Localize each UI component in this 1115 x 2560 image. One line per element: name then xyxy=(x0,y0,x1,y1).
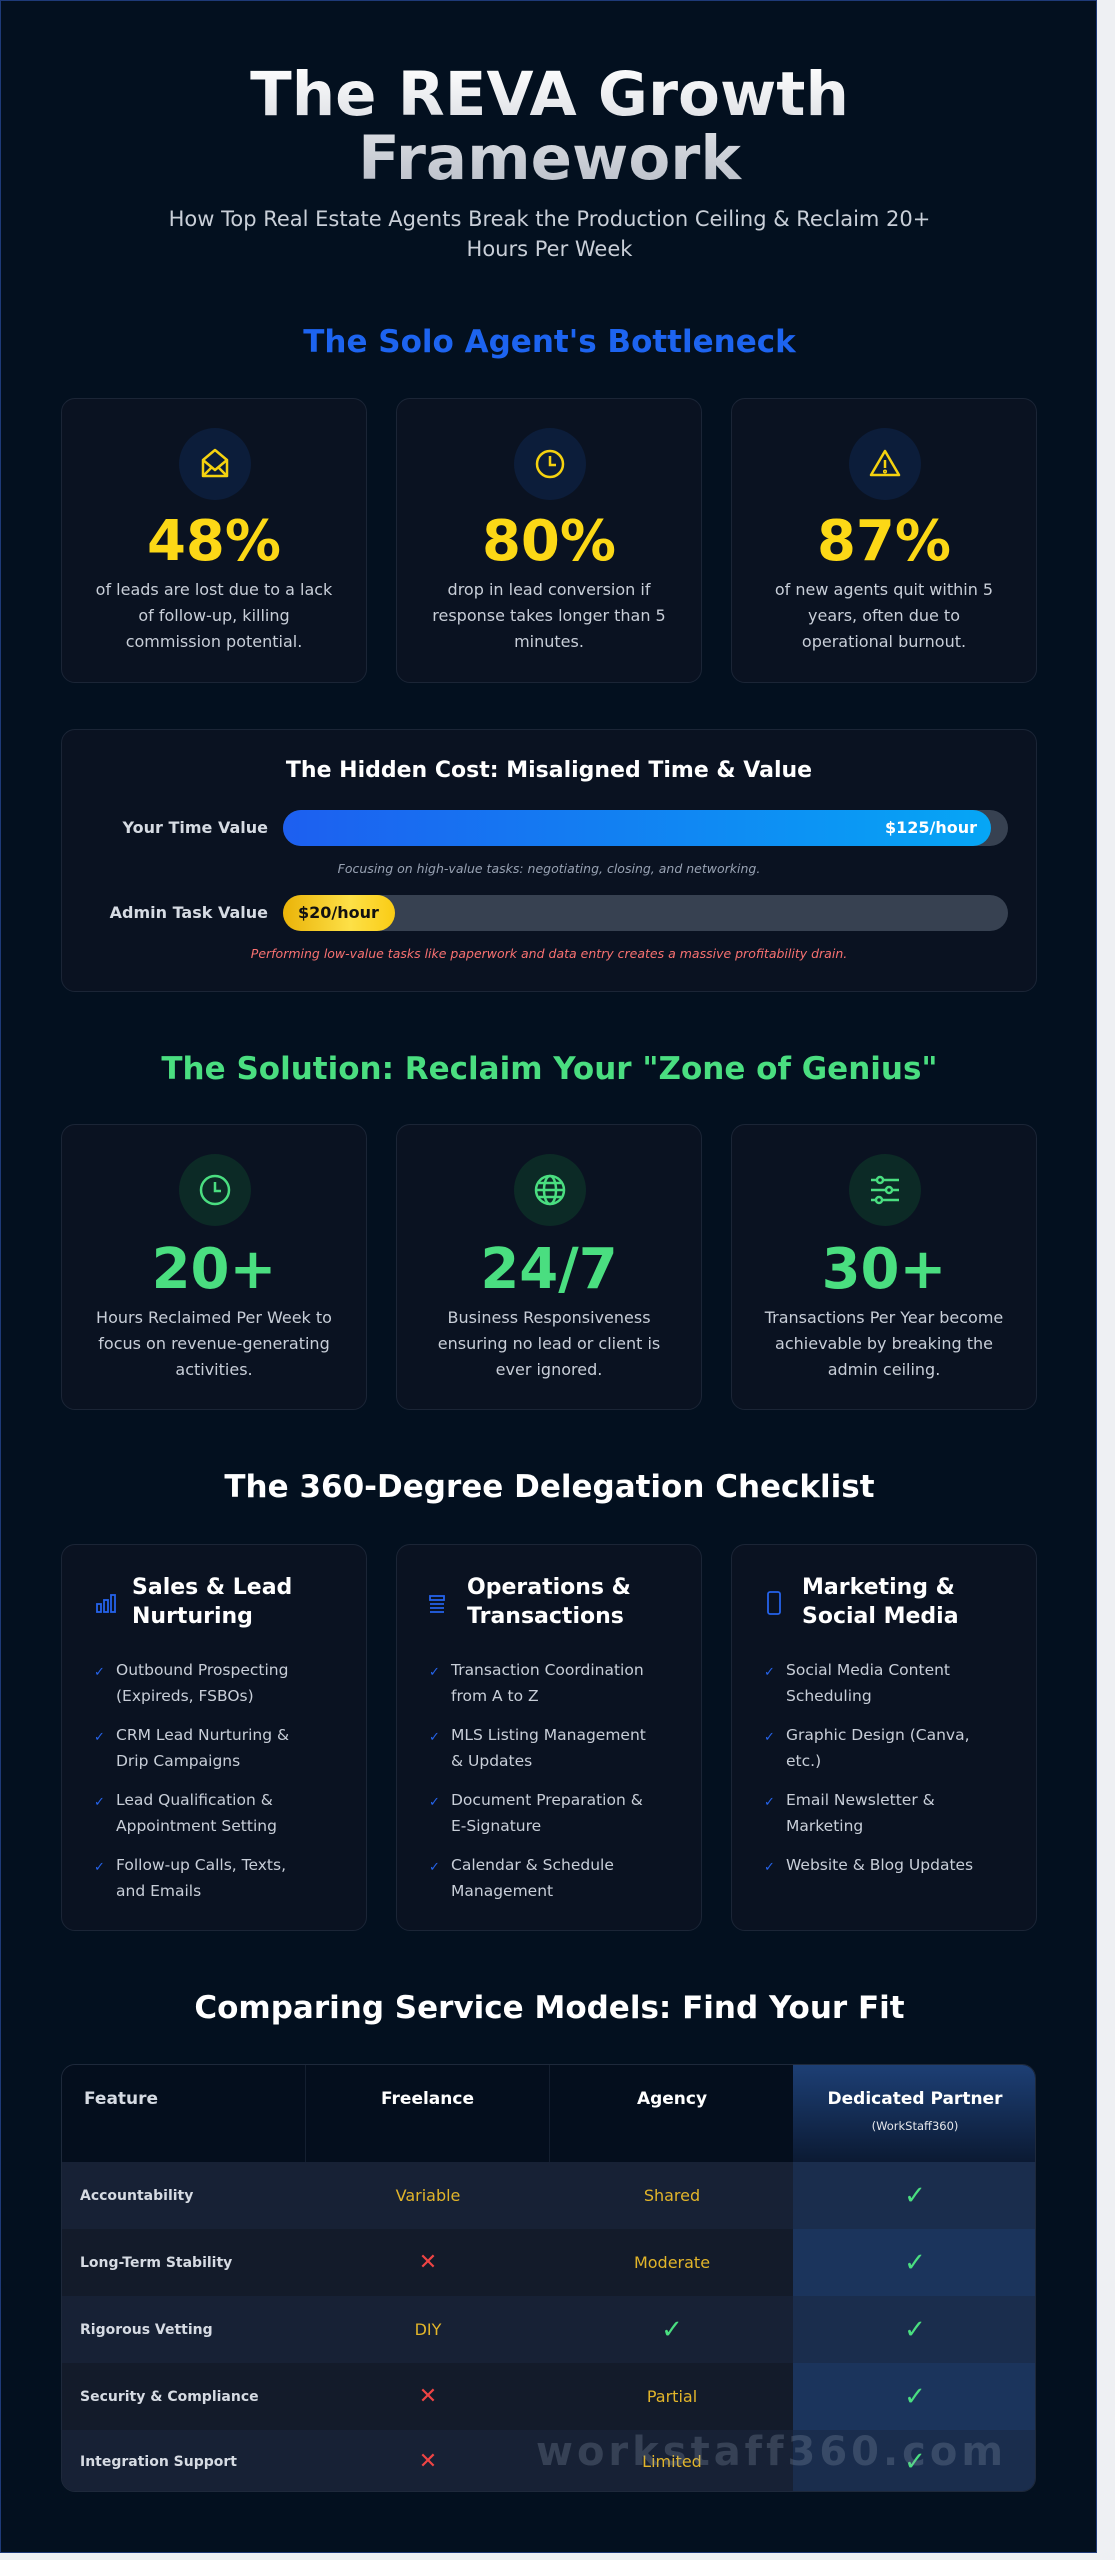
icon: envelope xyxy=(179,428,251,500)
comparison table xyxy=(61,2064,1036,2492)
label: your time value: Your Time Value xyxy=(123,818,268,837)
row: security: Security & Compliance xyxy=(80,2388,259,2404)
list: Follow-up Calls, Texts, and Emails xyxy=(116,1856,286,1900)
subtitle: How Top Real Estate Agents Break the Production Ceiling & Reclaim 20+ xyxy=(169,207,930,231)
icon: list xyxy=(429,1595,445,1613)
row: accountability: Shared xyxy=(644,2186,700,2205)
stat description: of leads are lost due to a lack of follow-up, killing commission potential. xyxy=(96,580,332,651)
list: Email Newsletter & Marketing xyxy=(786,1791,935,1835)
bar: admin: $20/hour xyxy=(298,903,379,922)
panel: 24/7 xyxy=(396,1124,702,1410)
heading: Social Media xyxy=(802,1604,959,1629)
header row xyxy=(62,2065,1037,2162)
description: Hours Reclaimed Per Week to focus on revenue-generating activities. xyxy=(96,1308,332,1379)
heading: bottleneck: The Solo Agent's Bottleneck xyxy=(303,324,796,360)
heading: Marketing & xyxy=(802,1575,955,1600)
heading: solution: The Solution: Reclaim Your "Zone of Genius" xyxy=(161,1051,938,1087)
list: Social Media Content Scheduling xyxy=(786,1661,950,1705)
panel: 30+ xyxy=(731,1124,1037,1410)
stat number: 48% xyxy=(147,509,281,574)
header row: Feature xyxy=(84,2089,158,2109)
heading: Sales & Lead xyxy=(132,1575,292,1600)
list: Calendar & Schedule Management xyxy=(451,1856,614,1900)
panel: stat 87% xyxy=(731,398,1037,683)
icon: clock xyxy=(514,428,586,500)
row: stability: ✓ xyxy=(904,2248,926,2278)
row: integration: Limited xyxy=(642,2452,702,2471)
row: vetting: DIY xyxy=(415,2320,441,2339)
icon: sliders xyxy=(849,1154,921,1226)
caption: Focusing on high-value tasks: negotiating, closing, and networking. xyxy=(338,861,760,876)
list: Graphic Design (Canva, etc.) xyxy=(786,1726,970,1770)
stat description: of new agents quit within 5 years, often due to operational burnout. xyxy=(775,580,993,651)
panel: stat 80% xyxy=(396,398,702,683)
heading xyxy=(467,1575,631,1629)
title xyxy=(1,63,1098,191)
list: MLS Listing Management & Updates xyxy=(451,1726,646,1770)
heading: Nurturing xyxy=(132,1604,253,1629)
stat number: 20+ xyxy=(152,1237,276,1302)
caption: drain: Performing low-value tasks like paperwork and data entry creates a massive profitability drain. xyxy=(251,946,847,961)
header row: (WorkStaff360) xyxy=(872,2119,958,2133)
list xyxy=(766,1661,973,1874)
stat number: 24/7 xyxy=(480,1237,618,1302)
row: vetting xyxy=(62,2296,1037,2363)
bar: time value: $125/hour xyxy=(885,818,977,837)
stat number: 87% xyxy=(817,509,951,574)
row: integration: Integration Support xyxy=(80,2454,237,2470)
list: Transaction Coordination from A to Z xyxy=(451,1661,644,1705)
row: stability: Moderate xyxy=(634,2253,710,2272)
row: vetting: ✓ xyxy=(904,2314,926,2344)
list: Outbound Prospecting (Expireds, FSBOs) xyxy=(116,1661,288,1705)
panel: marketing checklist xyxy=(731,1544,1037,1931)
header row: Dedicated Partner xyxy=(828,2089,1002,2109)
list: Website & Blog Updates xyxy=(786,1856,973,1874)
row: security: ✕ xyxy=(419,2384,437,2409)
heading: comparison: Comparing Service Models: Find Your Fit xyxy=(194,1990,905,2026)
bar: time value xyxy=(283,810,1008,846)
heading xyxy=(132,1575,292,1629)
row: security: Partial xyxy=(647,2387,697,2406)
heading: The Hidden Cost: Misaligned Time & Value xyxy=(286,758,812,783)
list xyxy=(96,1661,289,1900)
row: accountability: Variable xyxy=(396,2186,460,2205)
list xyxy=(431,1661,646,1900)
panel: 20+ xyxy=(61,1124,367,1410)
subtitle: Hours Per Week xyxy=(467,237,632,261)
heading: Transactions xyxy=(467,1604,624,1629)
row: stability xyxy=(62,2229,1037,2296)
stat number: 30+ xyxy=(822,1237,946,1302)
row: accountability: Accountability xyxy=(80,2188,193,2204)
title: Framework xyxy=(358,123,741,194)
panel: stat 48% xyxy=(61,398,367,683)
label: admin task value: Admin Task Value xyxy=(110,903,268,922)
list: Document Preparation & E-Signature xyxy=(451,1791,643,1835)
heading xyxy=(802,1575,959,1629)
icon: globe xyxy=(514,1154,586,1226)
subtitle xyxy=(169,207,930,261)
icon: warning xyxy=(849,428,921,500)
row: stability: Long-Term Stability xyxy=(80,2254,232,2270)
stat number: 80% xyxy=(482,509,616,574)
watermark: workstaff360.com xyxy=(536,2429,1007,2475)
stat description: drop in lead conversion if response takes longer than 5 minutes. xyxy=(432,580,666,651)
description: Transactions Per Year become achievable by breaking the admin ceiling. xyxy=(765,1308,1003,1379)
panel: sales checklist xyxy=(61,1544,367,1931)
list: Lead Qualification & Appointment Setting xyxy=(116,1791,277,1835)
title: The REVA Growth xyxy=(250,59,849,130)
row: integration: ✓ xyxy=(904,2446,926,2476)
icon: bar chart xyxy=(96,1594,116,1613)
list: CRM Lead Nurturing & Drip Campaigns xyxy=(116,1726,289,1770)
bar: admin xyxy=(283,895,1008,931)
row: vetting: ✓ xyxy=(661,2314,683,2344)
row: vetting: Rigorous Vetting xyxy=(80,2322,213,2338)
heading: Operations & xyxy=(467,1575,631,1600)
row: integration xyxy=(62,2430,1037,2493)
icon: clock xyxy=(179,1154,251,1226)
row: accountability: ✓ xyxy=(904,2180,926,2210)
description: Business Responsiveness ensuring no lead or client is ever ignored. xyxy=(438,1308,660,1379)
heading: checklist: The 360-Degree Delegation Checklist xyxy=(224,1469,875,1505)
row: accountability xyxy=(62,2162,1037,2229)
row: security xyxy=(62,2363,1037,2430)
icon: phone xyxy=(767,1591,781,1615)
row: security: ✓ xyxy=(904,2382,926,2412)
row: integration: ✕ xyxy=(419,2449,437,2474)
header row: Agency xyxy=(637,2089,707,2109)
panel: hidden cost xyxy=(61,729,1037,992)
header row: Freelance xyxy=(381,2089,474,2109)
panel: operations checklist xyxy=(396,1544,702,1931)
row: stability: ✕ xyxy=(419,2250,437,2275)
